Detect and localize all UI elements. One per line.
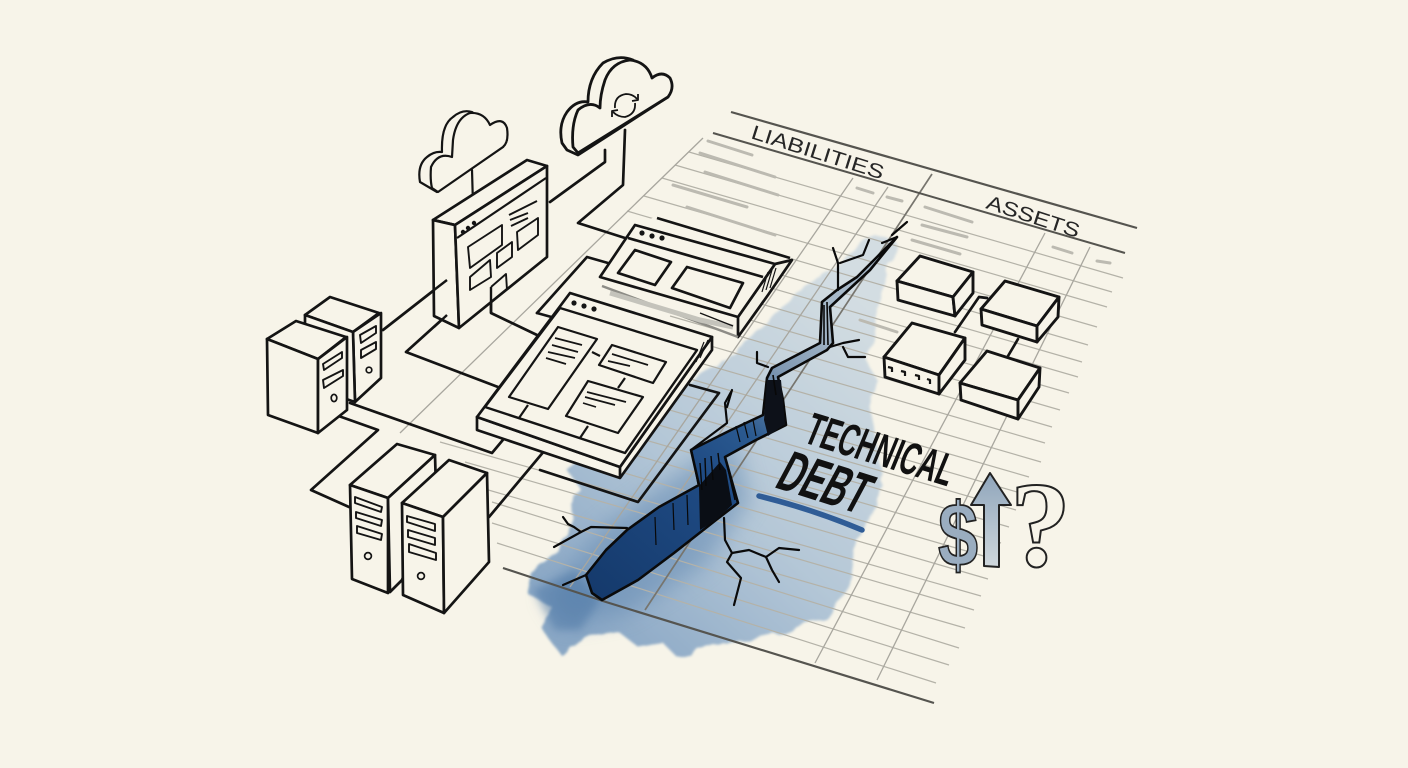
wire overlaps on tower panel [434, 280, 491, 327]
ledger column lines [400, 138, 1090, 680]
asset boxes [884, 256, 1059, 419]
lower server pair [350, 444, 489, 613]
placeholder text bars [673, 141, 1110, 332]
front server [267, 321, 347, 433]
ledger row lines [440, 152, 1123, 683]
back server [305, 297, 381, 402]
box 3 with ports [884, 323, 965, 394]
icon: question mark: ? [1010, 458, 1071, 593]
crack through the ledger [554, 222, 907, 605]
main UI card [477, 293, 712, 478]
ledger header and bottom rules [503, 112, 1137, 703]
upper server pair [267, 297, 381, 433]
ledger centre divider [645, 174, 932, 610]
sync symbol [612, 94, 638, 117]
header: liabilities: LIABILITIES [748, 122, 887, 184]
blue underline [759, 496, 862, 530]
word: debt: DEBT [767, 439, 884, 525]
watercolor stain [527, 233, 897, 657]
crack branches [554, 222, 907, 605]
icon: up arrow [971, 473, 1011, 567]
icon: dollar sign: $ [938, 485, 978, 586]
window panel on tower [433, 160, 547, 328]
box 4 [960, 351, 1040, 419]
crack shadow hatching [655, 302, 828, 545]
icon: small cloud [419, 111, 508, 192]
title: technical debt [767, 403, 963, 525]
box 2 [981, 281, 1059, 342]
icon: cloud with sync arrows [561, 58, 672, 155]
spreadsheet ledger [400, 112, 1137, 703]
upper UI card [600, 217, 792, 337]
left server [350, 444, 436, 593]
right server [402, 460, 489, 613]
word: technical: TECHNICAL [798, 403, 963, 496]
crack body [586, 237, 897, 600]
header: assets: ASSETS [983, 192, 1083, 243]
box 1 [897, 256, 973, 316]
connecting wires [311, 130, 1018, 517]
